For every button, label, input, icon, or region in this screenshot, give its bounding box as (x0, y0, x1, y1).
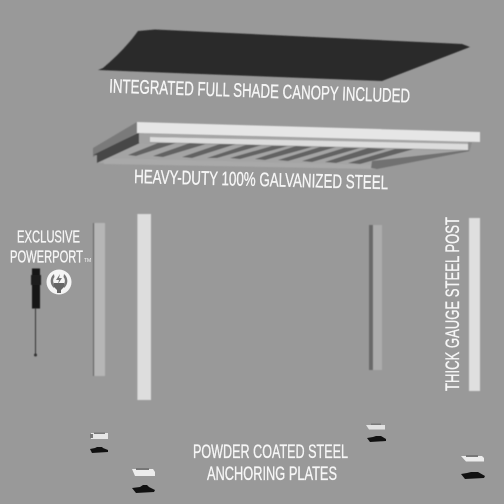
plate 3 (366, 424, 386, 442)
powerport unit (31, 268, 41, 356)
heading: frame: HEAVY-DUTY 100% GALVANIZED STEEL (134, 166, 388, 194)
post 1 (93, 223, 105, 376)
steel roof frame (93, 122, 480, 169)
heading: powerport: TM (84, 258, 91, 264)
canopy (98, 30, 470, 81)
bracket (139, 133, 150, 143)
plate 4 (461, 455, 485, 479)
heading: anchoring plates: ANCHORING PLATES (207, 464, 337, 485)
heading: powerport: EXCLUSIVE (17, 226, 80, 246)
heading: powerport: POWERPORT (10, 246, 83, 266)
plate 2 (132, 468, 155, 493)
heading: anchoring plates: POWDER COATED STEEL (193, 442, 348, 463)
heading: powerport (10, 226, 91, 266)
roof slats (128, 143, 414, 164)
post 2 (136, 214, 151, 400)
light lower edge (103, 158, 377, 169)
right side beam (371, 150, 470, 169)
front beam top (137, 122, 480, 142)
left side beam (93, 122, 137, 157)
heading: post: THICK GAUGE STEEL POST (442, 217, 464, 391)
plate 1 (90, 432, 108, 453)
anchoring plates (90, 424, 485, 493)
post 4 (469, 218, 480, 391)
icon: power plug (46, 270, 72, 294)
heading: anchoring plates (193, 442, 348, 485)
underside (97, 143, 470, 169)
post 3 (369, 225, 382, 370)
front rail (150, 137, 468, 150)
